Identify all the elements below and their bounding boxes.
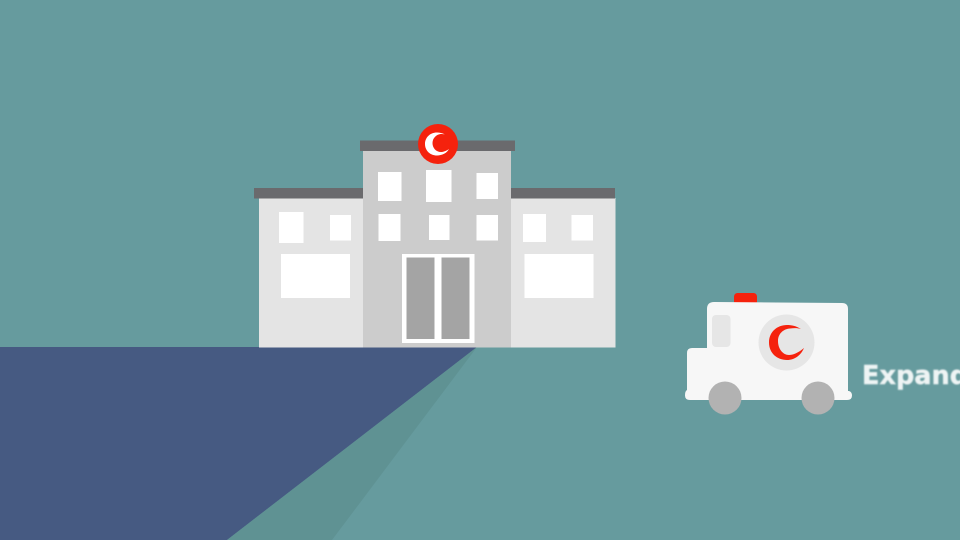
left wing (254, 188, 363, 348)
right wing (511, 188, 616, 348)
ambulance body (685, 302, 852, 400)
road shadow (227, 347, 477, 540)
siren (734, 293, 757, 305)
icon: red crescent emblem (418, 124, 458, 164)
ambulance (685, 293, 852, 414)
entrance door (402, 254, 474, 343)
hospital building (254, 124, 616, 348)
wheels (708, 382, 834, 414)
road: dark blue (0, 347, 477, 540)
central block (360, 140, 515, 348)
window (712, 315, 730, 347)
icon: crescent badge (758, 314, 814, 370)
